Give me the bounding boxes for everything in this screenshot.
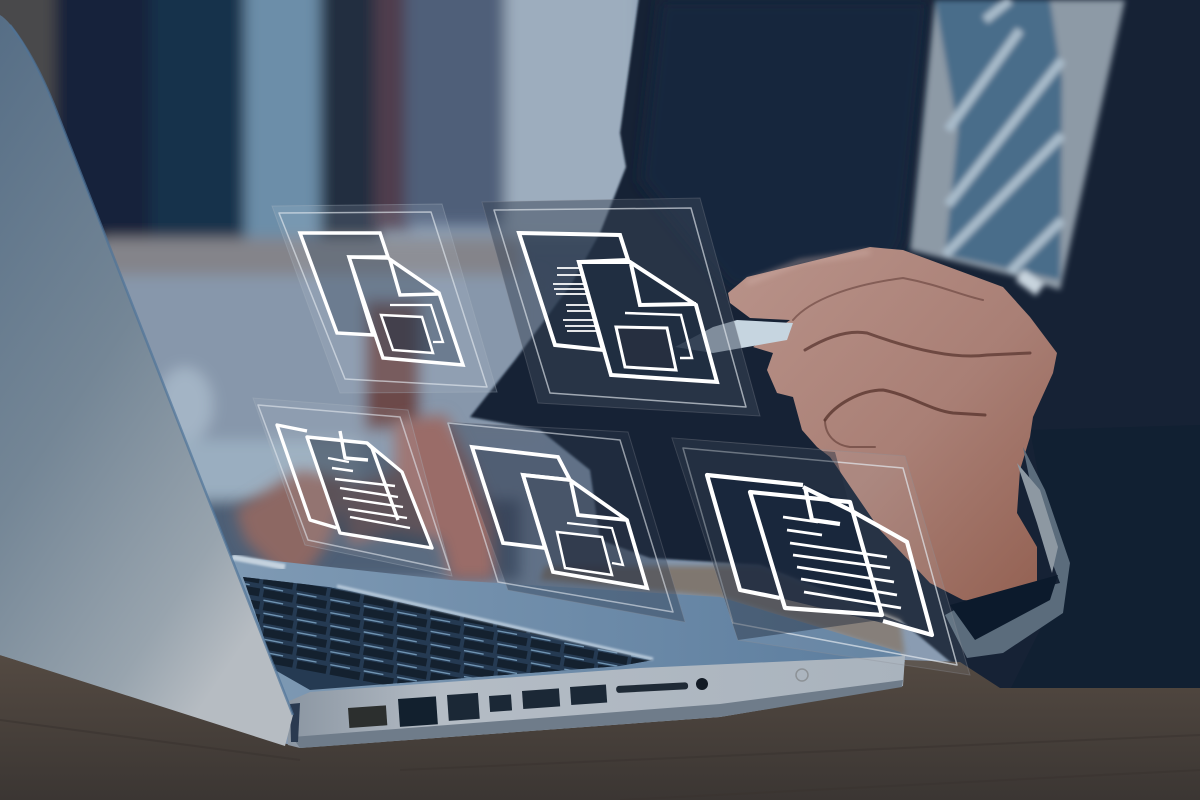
icon: documents with text: [277, 425, 432, 548]
panel: document lower left: [253, 398, 452, 576]
panel: document top centre: [482, 198, 760, 416]
keyboard: [243, 577, 654, 690]
suit jacket: [470, 0, 1200, 700]
panel: document lower right: [672, 438, 970, 675]
table behind laptop: [540, 566, 905, 655]
laptop front edge with ports: [287, 656, 905, 748]
panel: document lower centre: [447, 422, 685, 622]
icon: stacked documents: [472, 447, 647, 588]
laptop lid: [0, 15, 293, 746]
watch and cuff: [945, 447, 1070, 658]
writing hand: [675, 247, 1057, 602]
typing hand, blurred: [235, 415, 495, 582]
laptop deck: [230, 556, 905, 704]
icon: stack of text documents: [707, 475, 932, 635]
icon: document with lines: [519, 233, 717, 382]
icon: stacked documents: [300, 233, 463, 365]
shirt and tie: [910, 0, 1125, 290]
table: [0, 655, 1200, 800]
panel: document top left: [272, 204, 497, 393]
